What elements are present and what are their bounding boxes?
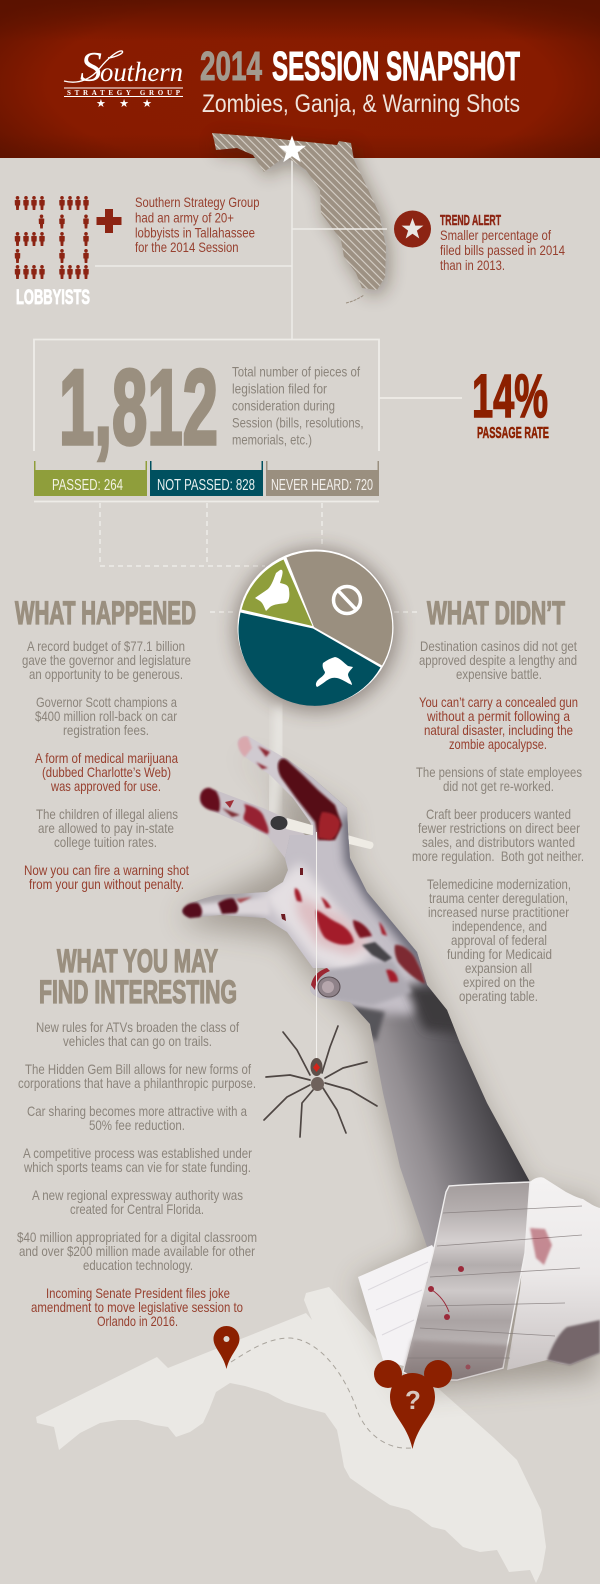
text: what didn't list: increased nurse practitioner	[428, 904, 569, 920]
cuff	[403, 1182, 530, 1380]
text: what didn't list: operating table.	[459, 988, 538, 1004]
stat: 14% passage rate	[472, 362, 549, 442]
text: what didn't list: approval of federal	[451, 932, 547, 948]
heading: what you may find interesting: WHAT YOU MAY	[57, 943, 218, 979]
smoke	[272, 712, 279, 815]
title: 2014	[200, 43, 262, 89]
slice: never heard	[286, 551, 392, 666]
palm highlight	[262, 862, 375, 975]
text: interesting list: and over $200 million made available for other	[19, 1243, 255, 1259]
callout: trend alert: TREND ALERT	[440, 213, 501, 229]
icon: capital star	[278, 136, 306, 162]
pin: Orlando mouse ears	[374, 1360, 452, 1449]
stat: 14% passage rate: PASSAGE RATE	[477, 425, 549, 442]
text: interesting list: A new regional expressway authority was	[32, 1187, 243, 1203]
text: what didn't list: without a permit following a	[426, 708, 570, 724]
text: legislation description: memorials, etc.)	[232, 432, 312, 448]
heading: what you may find interesting	[39, 943, 237, 1010]
bar: passed	[34, 461, 147, 496]
logo: Southern Strategy Group	[64, 45, 183, 110]
icon: thumbs up	[255, 570, 289, 611]
text: what happened list: gave the governor and legislature	[22, 652, 191, 668]
label: lobbyists: LOBBYISTS	[16, 286, 90, 309]
map shadow	[215, 138, 389, 295]
bar: never heard: NEVER HEARD: 720	[271, 477, 373, 494]
blood: pink smears	[296, 895, 372, 955]
shirt stripes	[408, 1206, 582, 1358]
bar: not passed	[150, 461, 263, 496]
text: legislation description: legislation filed for	[232, 380, 327, 396]
text: interesting list: Car sharing becomes more attractive with a	[27, 1103, 247, 1119]
logo: Southern Strategy Group: S	[80, 45, 102, 91]
text: what happened list	[22, 638, 191, 892]
text: army of lobbyists: Southern Strategy Group	[135, 194, 260, 210]
text: interesting list: $40 million appropriated for a digital classroom	[17, 1229, 257, 1245]
text: what didn't list: natural disaster, including the	[424, 722, 573, 738]
text: interesting list: vehicles that can go on trails.	[63, 1033, 212, 1049]
text: army of lobbyists: lobbyists in Tallahassee	[135, 224, 255, 240]
dashed connectors	[100, 503, 421, 612]
text: what didn't list: zombie apocalypse.	[449, 736, 547, 752]
text: what happened list: college tuition rates.	[54, 834, 157, 850]
bar: never heard	[266, 461, 379, 496]
text: interesting list	[17, 1019, 257, 1329]
big number: 1,812: 1,812	[59, 347, 218, 467]
bar: passed: PASSED: 264	[52, 477, 123, 494]
text: what happened list: $400 million roll-back on car	[35, 708, 177, 724]
text: what happened list: A form of medical marijuana	[35, 750, 178, 766]
subtitle: Zombies, Ganja, & Warning Shots	[202, 90, 520, 118]
skin light base	[246, 758, 433, 1020]
route: dashed path	[231, 1338, 411, 1448]
text: interesting list: 50% fee reduction.	[89, 1117, 185, 1133]
blood: palm patches	[295, 888, 425, 984]
text: what happened list: (dubbed Charlotte’s Web)	[42, 764, 171, 780]
header band	[0, 0, 600, 158]
map: Florida, bottom	[36, 1287, 546, 1583]
arm and shirt shadow	[181, 751, 598, 1391]
pie shadow	[234, 548, 398, 712]
pie chart	[238, 550, 394, 706]
bar: not passed: NOT PASSED: 828	[157, 477, 255, 494]
text: what didn't list: Craft beer producers wanted	[426, 806, 571, 822]
text: interesting list: education technology.	[83, 1257, 193, 1273]
finger: index, rear	[238, 736, 322, 850]
finger: middle left	[200, 788, 310, 872]
text: what didn't list: did not get re-worked.	[443, 778, 554, 794]
text: legislation description: consideration during	[232, 398, 335, 414]
text: legislation description: Total number of pieces of	[232, 364, 360, 380]
text: interesting list: New rules for ATVs broaden the class of	[36, 1019, 239, 1035]
blood: fingertip and knuckle	[278, 759, 342, 840]
pin: Tallahassee	[214, 1326, 240, 1369]
text: legislation description: Session (bills, resolutions,	[232, 414, 364, 430]
heading: what happened: WHAT HAPPENED	[15, 595, 196, 631]
thumb nail	[311, 968, 340, 997]
text: interesting list: amendment to move legislative session to	[31, 1299, 243, 1315]
hand and forearm	[180, 757, 530, 1247]
logo: Southern Strategy Group: STRATEGY GROUP	[67, 89, 181, 97]
text: interesting list: created for Central Florida.	[70, 1201, 204, 1217]
text: what happened list: A record budget of $77.1 billion	[27, 638, 185, 654]
text: army of lobbyists	[135, 194, 260, 255]
text: what didn't list	[412, 638, 584, 1004]
spider	[264, 1026, 377, 1137]
text: interesting list: which sports teams can vie for state funding.	[23, 1159, 251, 1175]
text: army of lobbyists: had an army of 20+	[135, 210, 234, 226]
stat: 14% passage rate: 14%	[472, 362, 548, 430]
icon: star in circle	[394, 210, 431, 248]
text: what didn't list: Telemedicine modernization,	[427, 876, 571, 892]
callout: trend alert: Smaller percentage of	[440, 227, 551, 243]
wrist shading	[402, 978, 458, 1036]
text: what didn't list: trauma center deregulation,	[429, 890, 568, 906]
pictogram: 20 lobbyists	[15, 196, 89, 279]
sleeve: right	[507, 1177, 600, 1370]
icon: thumbs down	[316, 657, 353, 687]
callout: trend alert: than in 2013.	[440, 257, 505, 273]
text: what happened list: Now you can fire a warning shot	[24, 862, 189, 878]
text: interesting list: corporations that have a philanthropic purpose.	[18, 1075, 256, 1091]
connector lines	[95, 158, 292, 339]
line to trend alert	[292, 228, 387, 230]
thumb tone	[314, 960, 412, 1006]
text: interesting list: Incoming Senate President files joke	[46, 1285, 230, 1301]
text: what happened list: registration fees.	[63, 722, 149, 738]
heading: what you may find interesting: FIND INTERESTING	[39, 974, 237, 1010]
text: what didn't list: expired on the	[463, 974, 535, 990]
logo: Southern Strategy Group: ★ ★ ★	[96, 98, 152, 110]
title	[200, 43, 520, 89]
text: what didn't list: expansion all	[465, 960, 532, 976]
text: what happened list: The children of illegal aliens	[36, 806, 178, 822]
pin: Orlando mouse ears: ?	[405, 1385, 421, 1415]
text: what happened list: was approved for use.	[50, 778, 161, 794]
text: what happened list: are allowed to pay in-state	[38, 820, 174, 836]
cuff bottom shading	[405, 1340, 510, 1380]
callout: trend alert: filed bills passed in 2014	[440, 242, 565, 258]
text: what didn't list: expensive battle.	[456, 666, 542, 682]
text: what happened list: Governor Scott champions a	[36, 694, 177, 710]
text: interesting list: The Hidden Gem Bill allows for new forms of	[25, 1061, 251, 1077]
text: interesting list: Orlando in 2016.	[97, 1313, 178, 1329]
logo: Southern Strategy Group: outhern	[100, 57, 183, 87]
icon: plus sign	[96, 209, 122, 233]
shirt sleeve	[358, 1177, 600, 1380]
text: what happened list: from your gun without penalty.	[29, 876, 184, 892]
text: interesting list: A competitive process was established under	[23, 1145, 252, 1161]
text: army of lobbyists: for the 2014 Session	[135, 239, 238, 255]
text: what didn't list: independence, and	[452, 918, 547, 934]
blood: little finger	[182, 898, 238, 918]
blood stains on cuff	[428, 1228, 552, 1370]
legislation frame	[34, 340, 462, 502]
icon: prohibited sign	[334, 586, 360, 614]
slice: not passed	[239, 612, 380, 706]
Florida map: hatched	[212, 133, 386, 290]
keys	[346, 295, 364, 303]
collar: white fold	[358, 1245, 437, 1367]
text: what didn't list: funding for Medicaid	[447, 946, 552, 962]
back of hand shading	[349, 815, 432, 992]
slice: passed	[242, 560, 312, 626]
text: what happened list: an opportunity to be generous.	[29, 666, 183, 682]
callout: trend alert	[440, 213, 565, 273]
text: legislation description	[232, 364, 364, 448]
spider thread	[316, 832, 318, 1062]
cigarette	[270, 816, 373, 849]
